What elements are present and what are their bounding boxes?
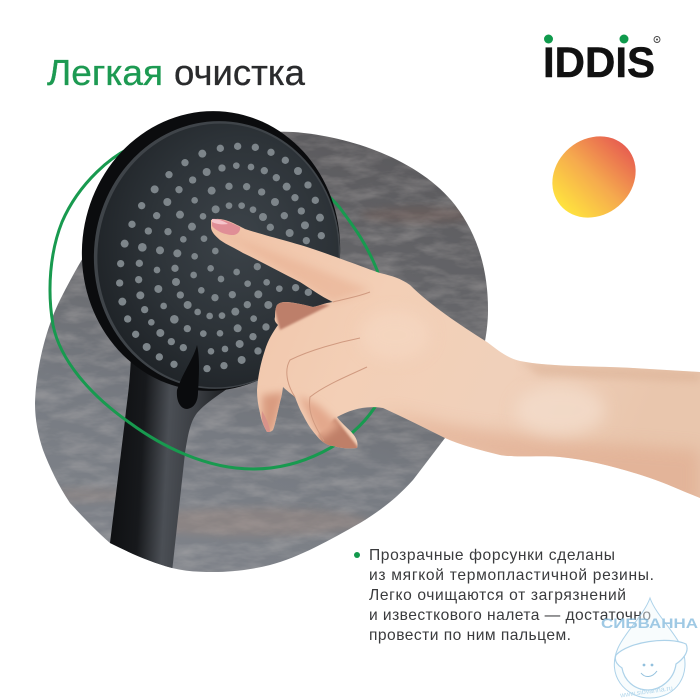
gradient blob: [536, 120, 652, 234]
hand silhouette: [211, 219, 700, 498]
description text: и известкового налета — достаточно: [369, 607, 651, 624]
registered mark: [654, 36, 660, 42]
title: Легкая: [47, 52, 163, 93]
head face: [84, 112, 352, 399]
shower handle: [110, 362, 226, 568]
spray nozzles: [116, 143, 325, 372]
middle finger nail: [262, 411, 270, 432]
rim highlight: [81, 109, 353, 401]
stone texture blob: [30, 125, 495, 577]
watermark face: [641, 664, 657, 677]
shower head: [68, 98, 354, 404]
description text: Прозрачные форсунки сделаны: [369, 547, 615, 564]
watermark bathtub: [615, 640, 687, 690]
green outline circle: [50, 138, 386, 469]
IDDIS logo: [543, 34, 660, 87]
head rim: [68, 98, 354, 404]
logo green dots: [544, 34, 628, 44]
description text: [354, 547, 654, 644]
handle hook: [177, 345, 199, 409]
watermark url: www.sibvanna.ru: [619, 685, 673, 700]
logo wordmark: IDDIS: [543, 39, 655, 87]
description text: провести по ним пальцем.: [369, 627, 571, 644]
nail highlight: [212, 219, 228, 224]
description text: из мягкой термопластичной резины.: [369, 567, 654, 584]
hand shading: [211, 225, 700, 510]
title second word: очистка: [174, 52, 306, 93]
watermark: [601, 598, 698, 700]
finger creases: [287, 292, 370, 441]
watermark name: СИБВАННА: [601, 615, 698, 631]
hand: [211, 219, 700, 510]
fingernail: [212, 219, 240, 235]
description text: Легко очищаются от загрязнений: [369, 587, 626, 604]
bullet: [354, 552, 360, 558]
watermark drop: [614, 598, 685, 698]
